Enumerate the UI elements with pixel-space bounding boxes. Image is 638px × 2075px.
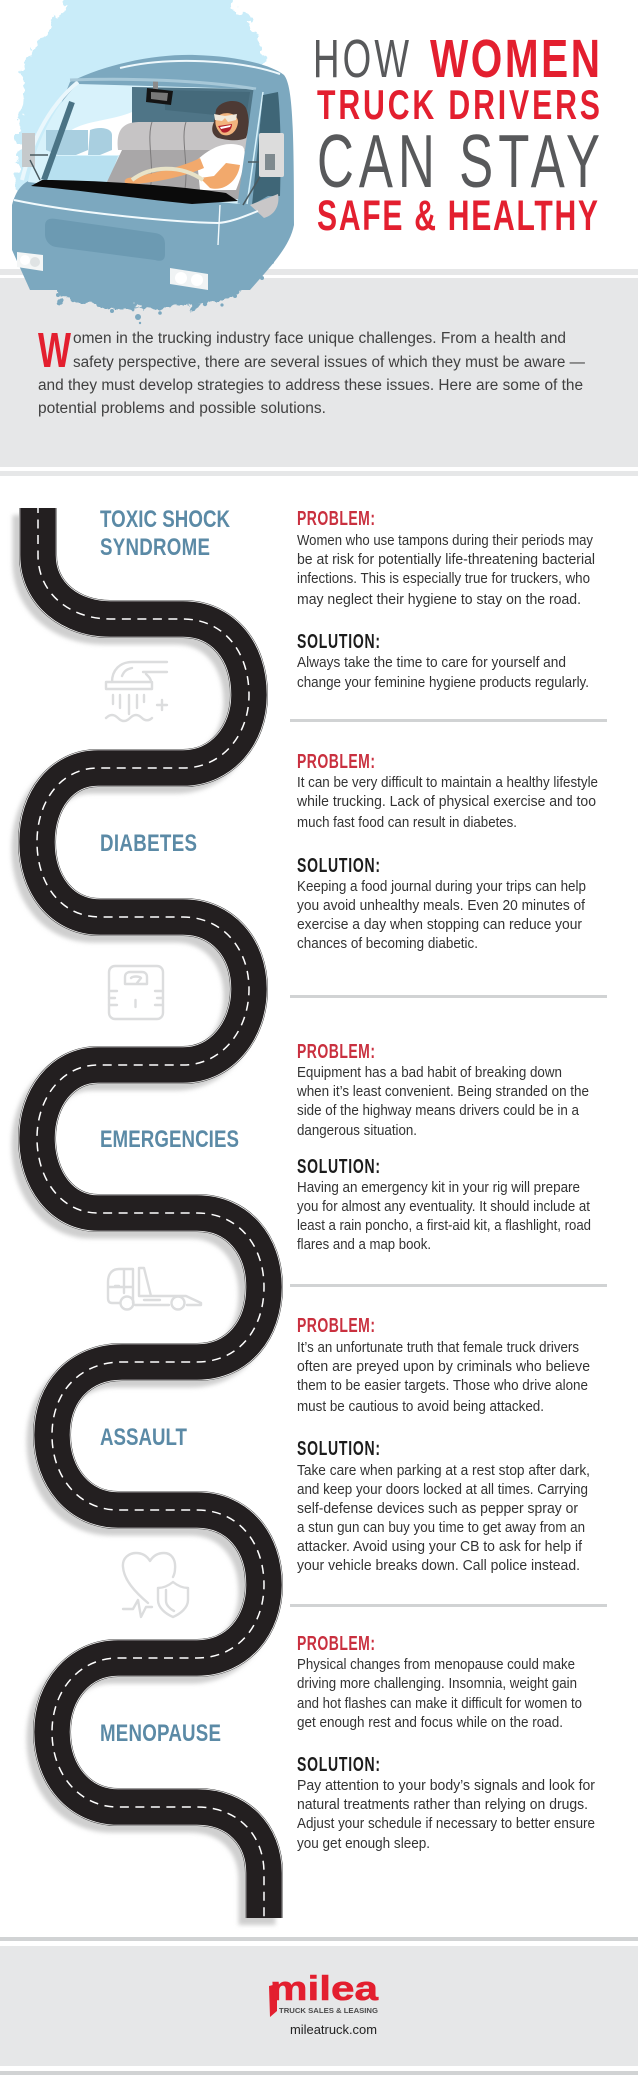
problem text: be at risk for potentially life-threatening bacterial	[297, 552, 595, 568]
problem text	[297, 506, 595, 608]
solution text: exercise a day when stopping can reduce your	[297, 917, 582, 933]
icon: shower	[106, 662, 167, 721]
solution text: Adjust your schedule if necessary to better ensure	[297, 1816, 595, 1832]
problem text	[296, 1039, 589, 1139]
hood highlight	[14, 200, 258, 223]
left headlight	[17, 252, 43, 271]
solution text: SOLUTION:	[297, 853, 380, 877]
title: SAFE & HEALTHY	[317, 191, 598, 239]
problem text: PROBLEM:	[297, 749, 375, 773]
problem text: when it’s least convenient. Being stranded on the	[296, 1084, 589, 1100]
icon: weighing scale	[109, 966, 163, 1019]
roof highlight	[120, 61, 280, 74]
logo: milea: TRUCK SALES & LEASING	[279, 2008, 379, 2015]
problem text: much fast food can result in diabetes.	[297, 815, 517, 831]
problem text	[297, 1631, 582, 1731]
problem text: Physical changes from menopause could make	[297, 1657, 575, 1673]
solution text: Always take the time to care for yourself and	[297, 655, 566, 671]
panel: assault	[100, 1313, 590, 1617]
solution text: natural treatments rather than relying on drugs.	[297, 1797, 588, 1813]
dashboard	[31, 180, 238, 204]
intro paragraph: safety perspective, there are several issues of which they must be aware —	[73, 354, 585, 371]
solution text: Pay attention to your body’s signals and look for	[297, 1778, 595, 1794]
heading: ASSAULT	[100, 1424, 187, 1451]
solution text: you avoid unhealthy meals. Even 20 minutes of	[297, 898, 586, 914]
winding road	[30, 508, 264, 1925]
panel: toxic shock syndrome	[100, 506, 595, 721]
intro paragraph: omen in the trucking industry face unique challenges. From a health and	[73, 330, 566, 347]
solution text: Keeping a food journal during your trips can help	[297, 879, 586, 895]
solution text: attacker. Avoid using your CB to ask for help if	[297, 1539, 583, 1555]
problem text: get enough rest and focus while on the road.	[297, 1715, 563, 1731]
solution text: Having an emergency kit in your rig will prepare	[297, 1180, 580, 1196]
solution text: your vehicle breaks down. Call police instead.	[297, 1558, 580, 1574]
solution text: SOLUTION:	[297, 1436, 380, 1460]
solution text	[297, 1752, 595, 1852]
intro band	[0, 269, 638, 476]
problem text: PROBLEM:	[297, 506, 375, 530]
heading: TOXIC SHOCK	[100, 506, 230, 533]
title: CAN STAY	[317, 119, 600, 203]
solution text: SOLUTION:	[297, 1154, 380, 1178]
solution text	[297, 629, 589, 691]
paint specks	[56, 249, 281, 324]
problem text: them to be easier targets. Those who drive alone	[297, 1378, 588, 1394]
solution text	[297, 1436, 590, 1574]
heading: DIABETES	[100, 830, 197, 857]
left mirror	[22, 133, 48, 180]
side window	[252, 92, 281, 205]
problem text: PROBLEM:	[297, 1313, 375, 1337]
solution text: Take care when parking at a rest stop after dark,	[297, 1463, 590, 1479]
problem text: PROBLEM:	[297, 1631, 375, 1655]
title: HOW	[313, 28, 409, 89]
right headlight	[170, 268, 208, 290]
panel: menopause	[100, 1631, 595, 1852]
problem text	[296, 749, 598, 831]
title: WOMEN	[430, 29, 600, 89]
solution text	[297, 1154, 591, 1253]
website: mileatruck.com	[290, 2022, 377, 2037]
solution text: and keep your doors locked at all times. Carrying	[297, 1482, 588, 1498]
title	[313, 28, 600, 239]
side mirror	[243, 133, 284, 205]
heading: MENOPAUSE	[100, 1720, 221, 1747]
logo: milea	[269, 1970, 379, 2017]
pale blue paint splash	[16, 0, 280, 200]
title: TRUCK DRIVERS	[317, 81, 600, 128]
solution text: SOLUTION:	[297, 1752, 380, 1776]
problem text: driving more challenging. Insomnia, weight gain	[297, 1676, 577, 1692]
heading: EMERGENCIES	[100, 1126, 239, 1153]
distant trucks	[46, 128, 112, 155]
cab interior	[132, 87, 256, 150]
woman driver	[125, 101, 249, 190]
intro paragraph: and they must develop strategies to address these issues. Here are some of the	[38, 377, 583, 394]
windshield pillars	[44, 102, 72, 180]
white sky clouds	[62, 112, 132, 155]
problem text: and hot flashes can make it difficult for women to	[297, 1696, 582, 1712]
solution text: you get enough sleep.	[297, 1836, 430, 1852]
problem text: often are preyed upon by criminals who believe	[297, 1359, 590, 1375]
solution text: you for almost any eventuality. It should include at	[297, 1199, 590, 1215]
solution text: SOLUTION:	[297, 629, 380, 653]
solution text: change your feminine hygiene products regularly.	[297, 675, 589, 691]
problem text: while trucking. Lack of physical exercise and too	[296, 794, 596, 810]
solution text: flares and a map book.	[297, 1237, 431, 1253]
solution text	[297, 853, 586, 952]
problem text: Equipment has a bad habit of breaking down	[297, 1065, 562, 1081]
problem text: infections. This is especially true for truckers, who	[297, 571, 590, 587]
problem text: Women who use tampons during their periods may	[297, 533, 594, 549]
grille	[45, 219, 165, 261]
illustration: woman driving truck	[12, 0, 294, 324]
problem text: side of the highway means drivers could be in a	[297, 1103, 580, 1119]
intro paragraph: potential problems and possible solutions.	[38, 400, 326, 417]
lower window	[44, 156, 118, 184]
panel: diabetes	[100, 749, 598, 1019]
solution text: chances of becoming diabetic.	[297, 936, 478, 952]
icon: tow truck	[108, 1268, 201, 1310]
problem text: dangerous situation.	[297, 1123, 417, 1139]
drop cap: W	[38, 324, 72, 378]
logo: milea: milea	[270, 1970, 379, 2008]
heading	[100, 506, 230, 561]
problem text: It can be very difficult to maintain a healthy lifestyle	[297, 775, 598, 791]
icon: heart and shield	[123, 1553, 188, 1617]
problem text: may neglect their hygiene to stay on the road.	[297, 592, 581, 608]
windshield sky	[28, 84, 256, 204]
problem text: It’s an unfortunate truth that female truck drivers	[297, 1340, 579, 1356]
problem text: PROBLEM:	[297, 1039, 375, 1063]
solution text: self-defense devices such as pepper spray or	[297, 1501, 578, 1517]
solution text: least a rain poncho, a first-aid kit, a flashlight, road	[297, 1218, 591, 1234]
solution text: a stun gun can buy you time to get away from an	[297, 1520, 585, 1536]
steering wheel	[132, 169, 203, 180]
rear-view mirror	[146, 80, 173, 105]
panel: emergencies	[100, 1039, 591, 1310]
seats	[106, 122, 250, 200]
problem text: must be cautious to avoid being attacked.	[297, 1399, 544, 1415]
truck body	[12, 55, 294, 290]
footer band	[0, 1937, 638, 2075]
intro paragraph	[38, 324, 585, 417]
problem text	[297, 1313, 590, 1415]
darker paint splash	[18, 215, 277, 308]
heading: SYNDROME	[100, 534, 210, 561]
